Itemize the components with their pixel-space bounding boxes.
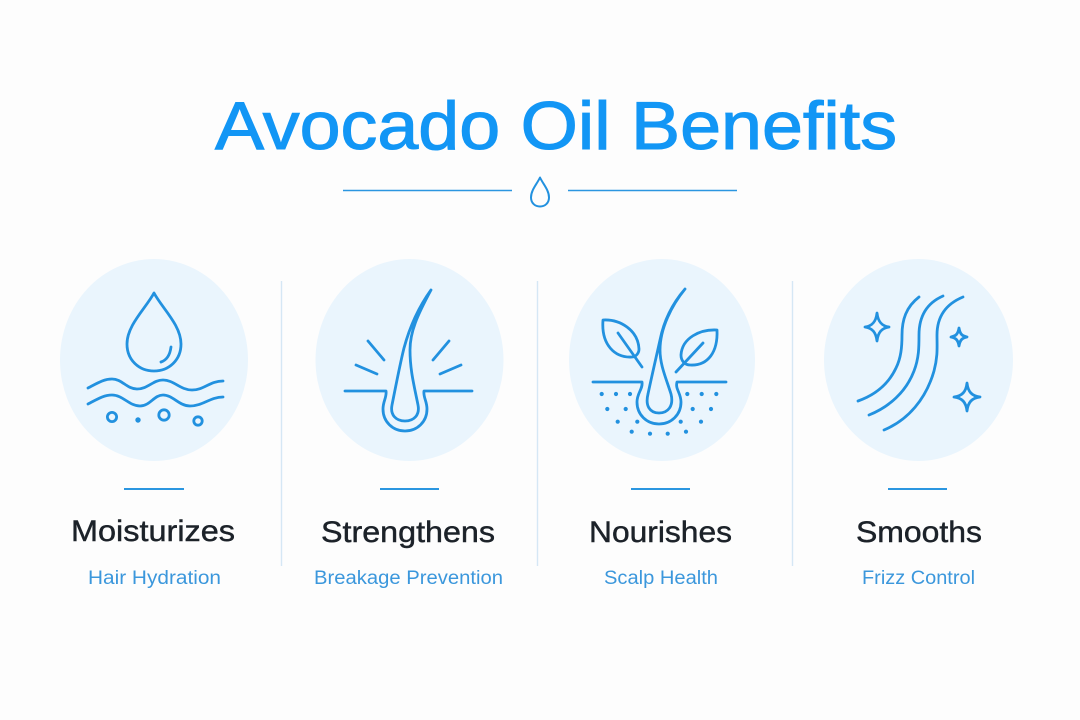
title divider with drop icon — [343, 178, 737, 206]
icon: hair follicle with rays — [345, 290, 472, 431]
panel: moisturizes — [60, 259, 248, 589]
heading: strengthens: Strengthens — [321, 516, 495, 549]
icon: smooth hair strands with sparkles — [858, 296, 980, 430]
short rule — [380, 488, 439, 490]
short rule — [124, 488, 184, 490]
heading: smooths: Smooths — [856, 516, 982, 549]
subheading: breakage prevention: Breakage Prevention — [314, 568, 503, 589]
subheading: hair hydration: Hair Hydration — [88, 568, 221, 589]
icon: scalp follicle with leaves — [593, 289, 726, 424]
heading: moisturizes: Moisturizes — [71, 515, 235, 548]
short rule — [888, 488, 947, 490]
heading: nourishes: Nourishes — [589, 516, 732, 549]
icon: scalp dots — [600, 392, 718, 436]
panel: smooths — [824, 259, 1013, 589]
short rule — [631, 488, 690, 490]
subheading: scalp health: Scalp Health — [604, 568, 718, 589]
icon: water drop over waves and bubbles — [88, 293, 223, 425]
subheading: frizz control: Frizz Control — [862, 568, 975, 589]
panel: strengthens — [314, 259, 504, 589]
title: Avocado Oil Benefits — [215, 88, 897, 164]
panel: nourishes — [569, 259, 755, 589]
